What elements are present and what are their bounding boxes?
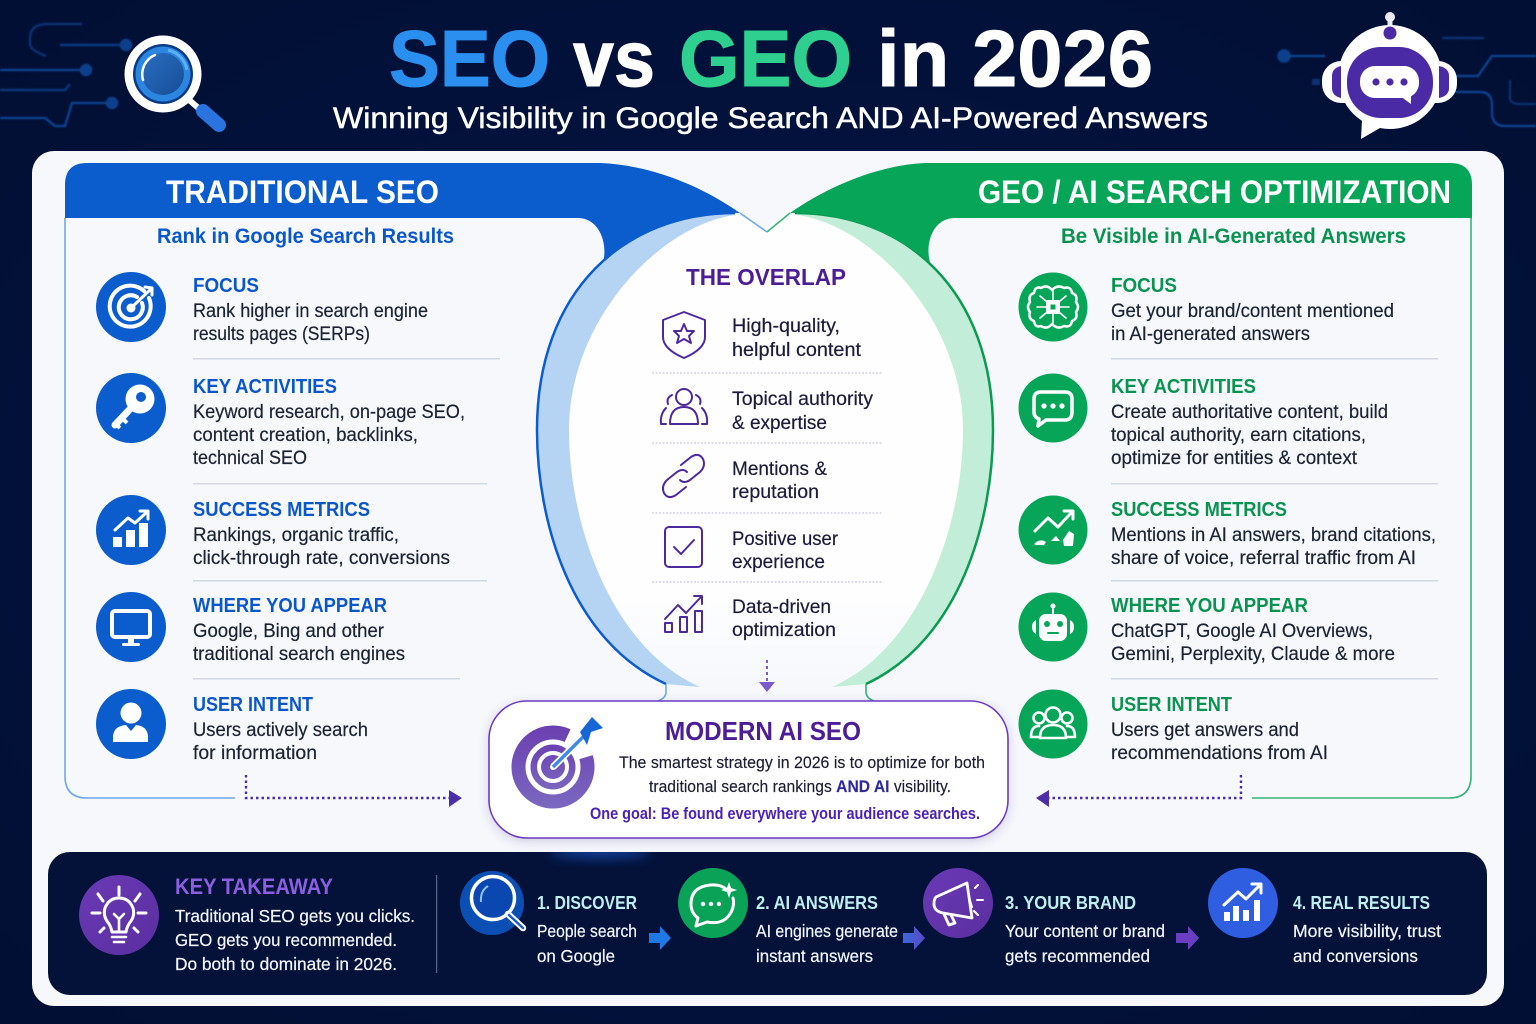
description [1111, 402, 1388, 469]
description [1111, 301, 1394, 345]
icon: monitor [96, 592, 166, 662]
description: share of voice, referral traffic from AI [1111, 548, 1416, 569]
label: WHERE YOU APPEAR [193, 595, 387, 617]
step 4: real results [1208, 868, 1441, 966]
text: mentions: Mentions & [732, 458, 827, 480]
text: user experience: Positive user [732, 528, 838, 550]
arrow: step 1 to 2 [649, 926, 671, 950]
arrow: step 2 to 3 [903, 926, 925, 950]
icon: robot [1018, 592, 1088, 662]
icon: group of people [1018, 690, 1088, 758]
panel: traditional SEO frame [65, 163, 767, 798]
icon: people [661, 389, 707, 424]
arrow: step 3 to 4 [1176, 926, 1199, 950]
subtitle: Winning Visibility in Google Search AND AI-Powered Answers [333, 102, 1208, 135]
heading: KEY TAKEAWAY [175, 874, 333, 899]
text: data driven: optimization [732, 619, 836, 641]
icon: results chart [1208, 868, 1278, 938]
description [193, 301, 428, 345]
description: traditional search engines [193, 644, 405, 665]
description: for information [193, 743, 317, 764]
description: Mentions in AI answers, brand citations, [1111, 525, 1436, 546]
description [1111, 525, 1436, 569]
heading: MODERN AI SEO [665, 716, 861, 746]
left item: user intent [96, 689, 368, 764]
label: FOCUS [1111, 275, 1177, 297]
text: mentions: reputation [732, 481, 819, 503]
icon: user [96, 689, 166, 759]
left item: success metrics [96, 495, 450, 569]
description: topical authority, earn citations, [1111, 425, 1366, 446]
panel: modern AI SEO callout [489, 701, 1008, 838]
icon: checkbox [665, 527, 702, 567]
icon: search [460, 871, 524, 935]
right item: where you appear [1018, 592, 1395, 665]
description: Google, Bing and other [193, 621, 385, 642]
icon: megaphone [923, 868, 993, 938]
description: People search [537, 921, 637, 941]
description [1005, 921, 1165, 966]
subheading: GEO: Be Visible in AI-Generated Answers [1061, 224, 1406, 248]
icon: target [96, 272, 166, 342]
text: authority: & expertise [732, 412, 827, 434]
description: results pages (SERPs) [193, 324, 370, 345]
description [175, 906, 415, 974]
description [1111, 720, 1328, 764]
icon: shield star [663, 312, 705, 358]
description: optimize for entities & context [1111, 448, 1358, 469]
description [193, 525, 450, 569]
description: Traditional SEO gets you clicks. [175, 906, 415, 926]
icon: magnifying glass [124, 36, 219, 125]
label: 2. AI ANSWERS [756, 892, 878, 913]
description [1293, 921, 1441, 966]
decoration: left circuit lines [0, 24, 131, 126]
left item: where you appear [96, 592, 405, 665]
title [389, 14, 1153, 103]
title: SEO [389, 14, 550, 103]
text: user experience [732, 528, 838, 573]
heading: THE OVERLAP [686, 264, 846, 290]
text: data driven: Data-driven [732, 596, 831, 618]
description: Users actively search [193, 720, 368, 741]
panel: GEO frame [767, 163, 1472, 798]
icon: chart [96, 495, 166, 565]
text: user experience: experience [732, 551, 825, 573]
icon: light bulb [79, 875, 159, 955]
text: quality content [732, 315, 862, 361]
description: content creation, backlinks, [193, 425, 418, 446]
description: instant answers [756, 946, 873, 966]
label: KEY ACTIVITIES [193, 376, 337, 398]
icon: AI brain [1018, 272, 1088, 342]
icon: trend line [1018, 496, 1088, 564]
heading: GEO: GEO / AI SEARCH OPTIMIZATION [978, 174, 1451, 210]
right item: key activities [1018, 374, 1388, 469]
description [537, 921, 637, 966]
description: Get your brand/content mentioned [1111, 301, 1394, 322]
description: click-through rate, conversions [193, 548, 450, 569]
label: 3. YOUR BRAND [1005, 892, 1136, 913]
step 1: discover [460, 871, 637, 966]
description: Rank higher in search engine [193, 301, 428, 322]
description: Keyword research, on-page SEO, [193, 402, 465, 423]
title: vs [573, 14, 655, 103]
text: quality content: helpful content [732, 339, 862, 361]
icon: chain link [663, 455, 704, 497]
heading: traditional SEO: TRADITIONAL SEO [166, 174, 439, 210]
label: USER INTENT [1111, 694, 1232, 716]
subheading: traditional SEO: Rank in Google Search Results [157, 224, 454, 248]
description [756, 921, 898, 966]
description: Rankings, organic traffic, [193, 525, 399, 546]
description: traditional search rankings AND AI visibility. [649, 777, 951, 796]
text: quality content: High-quality, [732, 315, 840, 337]
decoration: right circuit lines [1278, 38, 1536, 126]
description: technical SEO [193, 448, 307, 469]
icon: target with dart [512, 717, 610, 808]
description: ChatGPT, Google AI Overviews, [1111, 621, 1373, 642]
description [1111, 621, 1395, 665]
text: data driven [732, 596, 836, 641]
right item: user intent [1018, 690, 1328, 764]
left item: focus [96, 272, 428, 345]
goal statement: One goal: Be found everywhere your audience searches. [590, 804, 980, 823]
left item: key activities [96, 373, 465, 469]
right item: success metrics [1018, 496, 1436, 569]
description [193, 402, 465, 469]
description: GEO gets you recommended. [175, 930, 397, 950]
arrow: traditional SEO to modern AI SEO [246, 775, 462, 807]
panel: overlap lens [569, 215, 963, 687]
description: on Google [537, 946, 615, 966]
arrow: overlap down to modern AI SEO [759, 660, 775, 692]
description: gets recommended [1005, 946, 1150, 966]
title: GEO [679, 14, 852, 103]
icon: chat bubble [1018, 374, 1088, 442]
description [619, 753, 985, 796]
icon: robot assistant [1322, 12, 1457, 139]
label: FOCUS [193, 275, 259, 297]
label: 1. DISCOVER [537, 892, 637, 913]
description: Gemini, Perplexity, Claude & more [1111, 644, 1395, 665]
description: The smartest strategy in 2026 is to optimize for both [619, 753, 985, 772]
label: USER INTENT [193, 694, 313, 716]
text: authority [732, 388, 873, 434]
description: AI engines generate [756, 921, 898, 941]
text: authority: Topical authority [732, 388, 873, 410]
text: mentions [732, 458, 827, 503]
arrow: GEO to modern AI SEO [1036, 775, 1241, 807]
description: recommendations from AI [1111, 743, 1328, 764]
title: in 2026 [877, 14, 1153, 103]
description: and conversions [1293, 946, 1418, 966]
description: More visibility, trust [1293, 921, 1441, 941]
step 2: AI answers [678, 868, 898, 966]
label: SUCCESS METRICS [193, 499, 370, 521]
label: 4. REAL RESULTS [1293, 892, 1430, 913]
description: Your content or brand [1005, 921, 1165, 941]
description [193, 720, 368, 764]
description: in AI-generated answers [1111, 324, 1310, 345]
step 3: your brand [923, 868, 1165, 966]
description: Users get answers and [1111, 720, 1299, 741]
icon: growth chart [665, 596, 702, 632]
label: SUCCESS METRICS [1111, 499, 1287, 521]
right item: focus [1018, 272, 1394, 345]
label: WHERE YOU APPEAR [1111, 595, 1309, 617]
description [193, 621, 405, 665]
description: Do both to dominate in 2026. [175, 954, 397, 974]
icon: key [96, 373, 166, 443]
panel: the overlap [652, 264, 883, 641]
label: KEY ACTIVITIES [1111, 376, 1256, 398]
panel: key takeaway bar [48, 847, 1487, 995]
icon: chat sparkle [678, 868, 748, 938]
description: Create authoritative content, build [1111, 402, 1388, 423]
